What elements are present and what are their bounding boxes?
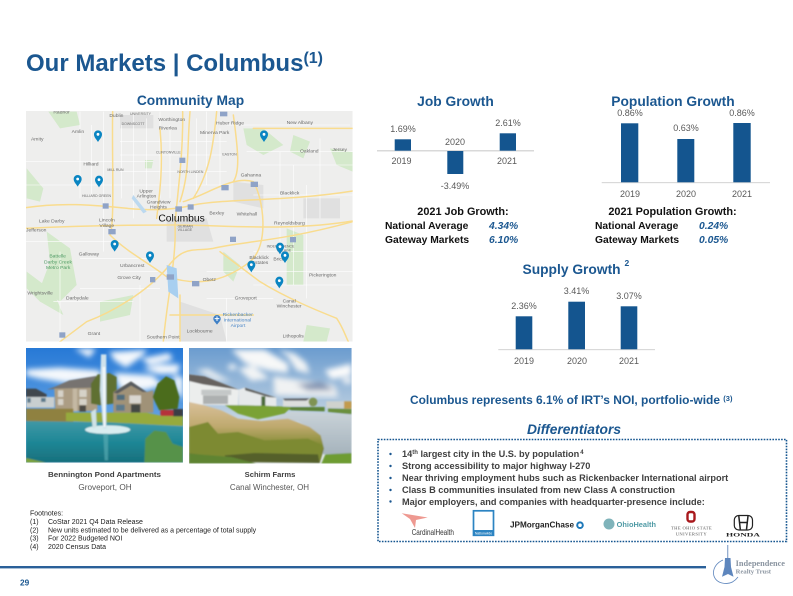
community map: CLINTONVILLE (156, 151, 181, 155)
community map: VILLAGE (178, 228, 193, 232)
bullet list: 4 (580, 450, 584, 456)
community map: Jefferson (26, 228, 47, 234)
logo: Independence Realty Trust: Realty Trust (736, 568, 772, 576)
community map: Amity (31, 137, 44, 143)
page number: 29 (20, 578, 30, 588)
caption: Schirm Farms (230, 470, 309, 492)
title: Our Markets | Columbus (26, 50, 303, 77)
bullet list: Class B communities insulated from new Class A construction (402, 485, 675, 495)
bar chart: supply growth: 3.07% (616, 291, 642, 301)
community map: International (224, 318, 251, 324)
map pins (74, 130, 289, 288)
footnotes: (1) (30, 519, 39, 526)
community map: Arlington (137, 193, 157, 199)
heading: supply growth: 2 (624, 258, 629, 268)
photo: Schirm Farms (189, 348, 352, 464)
stats: 2021 population growth (595, 206, 737, 246)
label: Columbus: Columbus (158, 213, 205, 224)
community map: Wrightsville (27, 291, 53, 297)
community map: Amlin (72, 129, 84, 135)
heading: job growth: Job Growth (417, 94, 494, 109)
bar chart: population growth: 2021 (732, 189, 752, 199)
stats: 2021 population growth: 0.24% (699, 221, 728, 232)
footnotes: (4) (30, 544, 39, 551)
community map: Gahanna (241, 173, 261, 179)
community map: Grandview (147, 200, 171, 206)
community map: DOWNSCOTT (122, 122, 145, 126)
bar chart: job growth: -3.49% (441, 181, 469, 191)
title: (1) (303, 50, 323, 67)
logo: The Ohio State University: THE OHIO STATE (671, 525, 712, 530)
logo: Independence Realty Trust: Independence (736, 559, 785, 568)
stats: 2021 job growth: National Average (385, 221, 469, 232)
bar chart: job growth: 1.69% (390, 124, 416, 134)
community map: Darbydale (66, 295, 89, 301)
bar chart: population growth: 0.63% (673, 123, 699, 133)
community map: Urbancrest (120, 263, 145, 269)
heading: population growth: Population Growth (611, 94, 735, 109)
caption: Bennington Pond Apartments: Groveport, OH (78, 483, 132, 492)
community map: Blacklick (280, 190, 300, 196)
logo: The Ohio State University (671, 512, 712, 537)
stats: 2021 job growth: Gateway Markets (385, 235, 469, 246)
logo: The Ohio State University: UNIVERSITY (676, 532, 707, 537)
photo: Bennington Pond Apartments (26, 348, 183, 463)
stats: 2021 population growth: National Average (595, 221, 679, 232)
community map: Winchester (277, 303, 302, 309)
logo: Honda (726, 516, 760, 539)
logo: OhioHealth (604, 518, 656, 530)
bar chart: job growth: 2.61% (495, 118, 521, 128)
bar chart: supply growth (498, 286, 655, 366)
community map (26, 110, 353, 342)
community map: Darby Creek (44, 260, 72, 266)
community map: Galloway (79, 251, 100, 257)
logo: Cardinal Health (402, 513, 454, 537)
bullet list: Near thriving employment hubs such as Rickenbacker International airport (402, 473, 728, 483)
callout: NOI share: (3) (723, 394, 733, 403)
bar chart: population growth: 2019 (620, 189, 640, 199)
logo: Nationwide: Nationwide (475, 532, 492, 536)
bar chart: supply growth: 2.36% (511, 301, 537, 311)
community map: GERMAN (178, 224, 193, 228)
stats: 2021 population growth: 0.05% (699, 235, 728, 246)
community map: Metro Park (46, 265, 71, 271)
logo: Honda: HONDA (726, 533, 760, 539)
community map: Canal (283, 299, 296, 305)
community map: Obetz (203, 277, 216, 283)
community map: Oakland (300, 149, 319, 155)
bullet list: largest city in the U.S. by population (418, 449, 580, 459)
community map: Upper (139, 189, 153, 195)
community map: Reynoldsburg (274, 220, 305, 226)
footnotes: For 2022 Budgeted NOI (48, 536, 122, 542)
logo: Nationwide (473, 511, 494, 536)
community map: Rickenbacker (223, 312, 253, 318)
heading: supply growth: Supply Growth (522, 262, 621, 277)
stats: 2021 job growth (385, 206, 518, 246)
footnotes: Footnotes: (30, 510, 63, 518)
community map: Radnor (53, 110, 70, 116)
community map: INDEPENDENCE (267, 245, 295, 249)
community map: Pickerington (309, 273, 337, 279)
caption: Bennington Pond Apartments (48, 470, 161, 492)
heading: community map: Community Map (137, 93, 244, 108)
footnotes (30, 510, 257, 551)
bar chart: supply growth: 2019 (514, 356, 534, 366)
community map: NORTH LINDEN (177, 170, 204, 174)
bar chart: supply growth: 3.41% (564, 286, 589, 296)
community map: New Albany (287, 120, 313, 126)
community map: Worthington (158, 117, 185, 123)
community map: Heights (150, 204, 167, 210)
bar chart: job growth (377, 118, 534, 191)
community map: Huber Ridge (216, 121, 244, 127)
logo: OhioHealth: OhioHealth (617, 522, 656, 529)
community map: Brice (273, 257, 285, 263)
stats: 2021 job growth: 2021 Job Growth: (417, 206, 509, 218)
footnotes: 2020 Census Data (48, 544, 106, 551)
bullet list: 14 (402, 449, 412, 459)
footnotes: New units estimated to be delivered as a percentage of total supply (48, 528, 257, 534)
icon: airport (213, 315, 221, 325)
stats: 2021 population growth: 2021 Population Growth: (608, 206, 737, 218)
bar chart: supply growth: 2021 (619, 356, 639, 366)
community map: EASTON (222, 153, 237, 157)
bullet list (389, 449, 728, 507)
community map: Estates (252, 260, 269, 266)
bar chart: population growth: 0.86% (729, 108, 755, 118)
footnotes: (3) (30, 536, 39, 542)
bar chart: job growth: 2020 (445, 137, 465, 147)
community map: HILLIARD GREEN (82, 194, 112, 198)
community map: Dublin (109, 113, 124, 119)
logo: Cardinal Health: CardinalHealth (412, 527, 454, 537)
community map: Southern Point (147, 334, 180, 340)
bullet list: Strong accessibility to major highway I-270 (402, 461, 590, 471)
stats: 2021 population growth: Gateway Markets (595, 235, 679, 246)
community map: UNIVERSITY (130, 112, 152, 116)
community map: Grove City (117, 275, 141, 281)
community map: Village (99, 223, 114, 229)
community map: Grant (88, 331, 101, 337)
bar chart: job growth: 2021 (497, 156, 517, 166)
community map: Lake Darby (39, 219, 65, 225)
community map: MILL RUN (107, 168, 124, 172)
community map: VILLAGE (277, 249, 292, 253)
caption: Schirm Farms: Schirm Farms (245, 470, 295, 479)
bar chart: job growth: 2019 (391, 156, 412, 166)
community map: Hilliard (83, 162, 99, 168)
footer rule (0, 566, 706, 568)
logo: Independence Realty Trust (713, 545, 785, 584)
community map: Blacklick (249, 255, 269, 261)
bullet list: Major employers, and companies with headquarter-presence include: (402, 497, 705, 507)
caption: Schirm Farms: Canal Winchester, OH (230, 483, 309, 492)
bar chart: population growth: 2020 (676, 189, 696, 199)
stats: 2021 job growth: 6.10% (489, 235, 518, 246)
community map: Riverlea (159, 126, 177, 132)
callout: NOI share: Columbus represents 6.1% of IRT’s NOI, portfolio-wide (410, 393, 720, 407)
bar chart: supply growth: 2020 (567, 356, 587, 366)
bar chart: population growth: 0.86% (617, 108, 643, 118)
footnotes: CoStar 2021 Q4 Data Release (48, 519, 143, 526)
community map: Battelle (49, 254, 66, 260)
community map: Groveport (235, 296, 257, 302)
community map: Airport (231, 323, 246, 329)
heading: differentiators: Differentiators (527, 422, 621, 437)
community map: Bexley (209, 210, 225, 216)
panel: differentiators (378, 440, 786, 542)
bullet list: th (412, 450, 418, 456)
community map: Lockbourne (187, 329, 213, 335)
caption: Bennington Pond Apartments: Bennington Pond Apartments (48, 470, 161, 479)
footnotes: (2) (30, 528, 39, 534)
logo: JPMorgan Chase: JPMorganChase (510, 521, 575, 530)
bar chart: population growth (602, 108, 770, 199)
community map: Lincoln (99, 218, 115, 224)
community map: Whitehall (237, 212, 257, 218)
community map: Lithopolis (283, 333, 304, 339)
community map: Minerva Park (200, 130, 230, 136)
stats: 2021 job growth: 4.34% (488, 221, 518, 232)
community map: Jersey (332, 147, 348, 153)
